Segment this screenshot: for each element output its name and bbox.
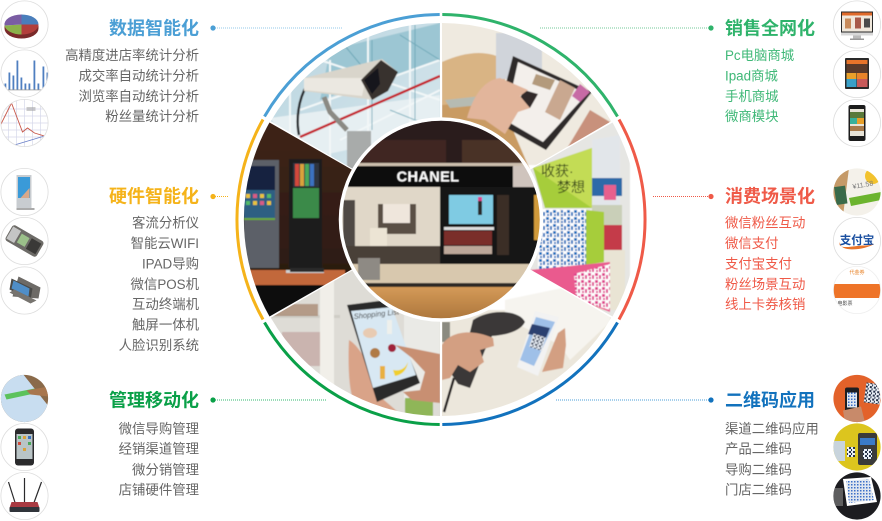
list: hardware: 互动终端机 bbox=[132, 297, 200, 312]
heading: sales: 销售全网化 bbox=[725, 18, 815, 38]
photo sector: kiosks bbox=[244, 122, 354, 316]
icon: yellow QR photo bbox=[833, 423, 881, 471]
list: data: 高精度进店率统计分析 bbox=[65, 47, 199, 63]
heading: management: 管理移动化 bbox=[109, 390, 199, 410]
heading: hardware: 硬件智能化 bbox=[109, 186, 199, 206]
icon: voucher: 电影票 bbox=[837, 300, 853, 307]
list: QR bbox=[725, 420, 819, 498]
ring segment: QR, dark blue bbox=[442, 322, 618, 424]
connector: sales bbox=[540, 25, 714, 31]
connector: data bbox=[210, 25, 343, 31]
icon: Alipay logo: 支付宝 bbox=[840, 233, 874, 247]
list: consumption bbox=[725, 216, 805, 312]
photo sector: barcode scanner bbox=[442, 288, 611, 416]
icon: router bbox=[1, 472, 48, 520]
center store photo: CHANEL bbox=[397, 170, 459, 186]
list: hardware bbox=[119, 214, 200, 353]
icon: POS machine bbox=[1, 267, 48, 314]
list: management: 微分销管理 bbox=[132, 462, 199, 478]
photo sector: QR boxes: 梦想 bbox=[557, 179, 585, 195]
list: management bbox=[119, 422, 199, 498]
icon: line chart bbox=[0, 99, 48, 147]
connector: hardware bbox=[210, 194, 229, 199]
list: data bbox=[65, 47, 199, 124]
icon: desktop monitor bbox=[833, 1, 881, 48]
heading: consumption: 消费场景化 bbox=[725, 186, 815, 206]
icon: bar chart bbox=[0, 50, 48, 97]
photo sector: QR boxes: 收获· bbox=[541, 163, 574, 179]
icon: voucher bbox=[833, 266, 881, 314]
connector: QR bbox=[556, 397, 714, 403]
icon: voucher: 代金券 bbox=[849, 269, 865, 276]
list: hardware: 智能云WIFI bbox=[131, 236, 199, 251]
photo sector: security camera bbox=[270, 23, 440, 168]
ring segment: consumption, red bbox=[619, 120, 645, 320]
list: management: 经销渠道管理 bbox=[119, 442, 199, 456]
list: hardware: 触屏一体机 bbox=[132, 318, 200, 332]
list: sales: 手机商城 bbox=[725, 89, 779, 104]
photo sector: QR boxes bbox=[530, 115, 630, 325]
photo sector: phone shopping list: Shopping List bbox=[353, 307, 400, 321]
list: hardware: 人脸识别系统 bbox=[119, 338, 199, 353]
icon: WeChat payment photo bbox=[0, 374, 48, 422]
list: QR: 渠道二维码应用 bbox=[725, 420, 819, 436]
center circle border bbox=[340, 119, 542, 320]
list: data: 浏览率自动统计分析 bbox=[78, 88, 199, 104]
center store photo bbox=[340, 118, 544, 323]
list: consumption: 微信支付 bbox=[725, 236, 779, 251]
heading: QR: 二维码应用 bbox=[725, 390, 815, 410]
list: QR: 产品二维码 bbox=[725, 442, 792, 456]
ring segment: hardware, yellow bbox=[237, 120, 263, 320]
list: management: 微信导购管理 bbox=[119, 422, 199, 436]
photo sector: phone shopping list bbox=[260, 270, 442, 420]
ring segment: sales, green bbox=[442, 14, 618, 116]
icon: dark QR photo bbox=[833, 472, 881, 520]
list: consumption: 微信粉丝互动 bbox=[725, 216, 805, 230]
wheel diagram bbox=[237, 14, 645, 424]
icon: payment photo: ¥11.58 bbox=[852, 180, 874, 191]
list: QR: 门店二维码 bbox=[725, 482, 792, 498]
list: hardware: 客流分析仪 bbox=[132, 214, 199, 230]
icon: payment photo bbox=[833, 168, 881, 216]
list: hardware: 微信POS机 bbox=[131, 277, 200, 292]
icon: POS terminal bbox=[1, 217, 48, 265]
icon: iPhone bbox=[1, 423, 48, 471]
connector: consumption bbox=[653, 194, 714, 199]
list: consumption: 粉丝场景互动 bbox=[725, 277, 805, 292]
list: hardware: IPAD导购 bbox=[142, 256, 199, 272]
ring segment: data, blue bbox=[264, 14, 440, 116]
icon: Alipay logo bbox=[833, 217, 881, 265]
list: sales: 微商模块 bbox=[725, 109, 779, 124]
icon: orange QR photo bbox=[833, 374, 882, 422]
photo sector: tablet shopping bbox=[442, 23, 611, 170]
list: data: 粉丝量统计分析 bbox=[105, 109, 199, 124]
icon: smartphone bbox=[833, 99, 881, 147]
ring segment: management, green bbox=[264, 322, 440, 424]
list: sales: Pc电脑商城 bbox=[725, 48, 794, 63]
list: data: 成交率自动统计分析 bbox=[78, 68, 199, 84]
connector: management bbox=[210, 397, 326, 403]
icon: pie chart bbox=[1, 1, 48, 48]
icon: tablet bbox=[833, 50, 881, 98]
list: consumption: 线上卡券核销 bbox=[725, 297, 805, 312]
heading: data: 数据智能化 bbox=[109, 18, 199, 38]
list: management: 店铺硬件管理 bbox=[119, 482, 199, 498]
list: sales: Ipad商城 bbox=[725, 68, 778, 84]
list: sales bbox=[725, 48, 794, 124]
icon: kiosk bbox=[1, 168, 48, 216]
list: QR: 导购二维码 bbox=[725, 462, 792, 478]
list: consumption: 支付宝支付 bbox=[725, 256, 792, 272]
